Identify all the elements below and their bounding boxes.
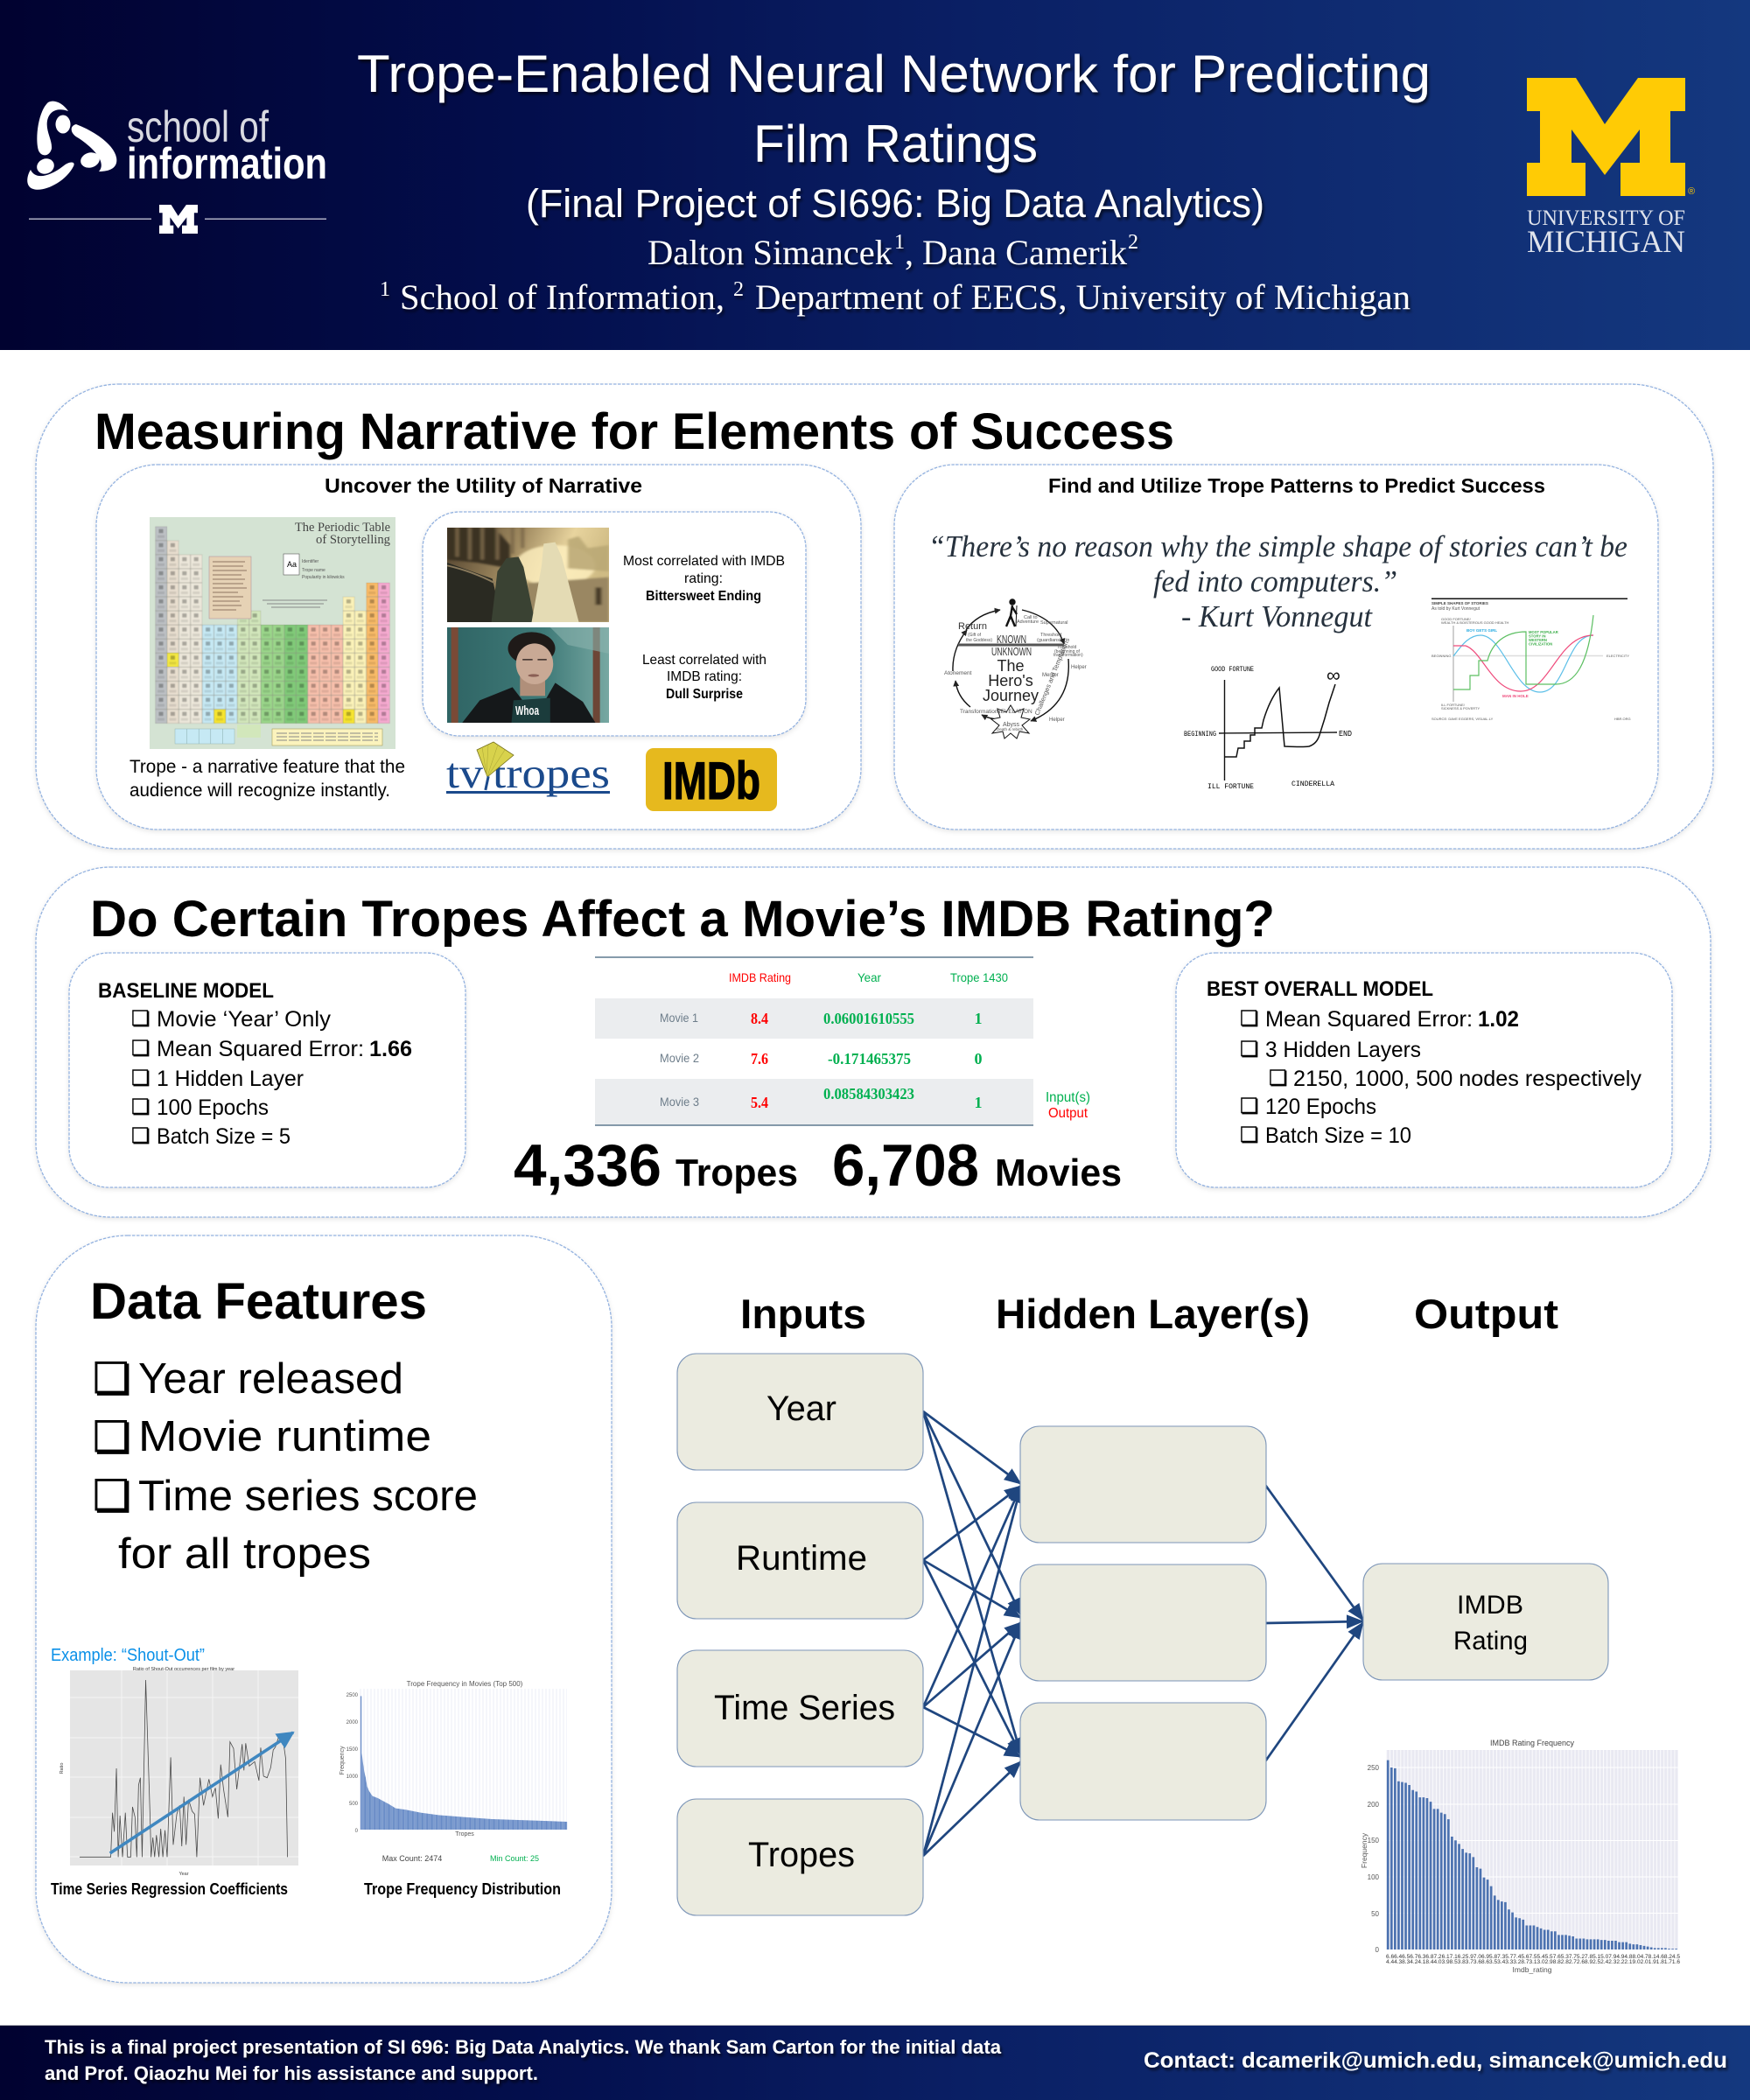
diagram: neural network [677,1291,1608,1915]
diagram: Cinderella story shape: CINDERELLA [1292,780,1334,788]
panel: best overall model [1176,953,1672,1187]
chart: trope frequency distribution: 1000 [346,1774,359,1780]
chart: simple shapes of stories: SICKNESS & POVERTY [1441,706,1480,710]
table row: movie 2: 7.6 [751,1050,768,1068]
list: data features: Time series score [138,1473,478,1520]
node: year: Year [766,1390,836,1428]
node: hidden layer 2 [1020,1564,1266,1681]
diagram: hero's journey: Challenges and Temptations [1033,637,1071,717]
heading: baseline model: BASELINE MODEL [98,979,274,1003]
chart: simple shapes of stories: WEALTH & BOISTEROUS GOOD HEALTH [1441,620,1509,625]
image: periodic table of storytelling: of Storytelling [316,533,390,547]
affiliations [380,277,1410,317]
arrows: hidden layers to output [1265,1485,1363,1761]
diagram: hero's journey: KNOWN [997,633,1026,646]
panel: do certain tropes affect rating [36,867,1711,1217]
table row: movie 1: Movie 1 [660,1011,698,1025]
diagram: Cinderella story shape: END [1339,730,1352,738]
table row: movie 3: 5.4 [751,1094,768,1111]
diagram: hero's journey: The [997,657,1025,675]
authors: Dana Camerik [922,233,1127,272]
chart: imdb rating frequency: 250 [1368,1764,1380,1772]
diagram: hero's journey: Supernatural [1040,620,1068,626]
diagram: hero's journey: Abyss [1003,722,1020,728]
diagram: hero's journey: Mentor [1042,673,1059,678]
list: baseline parameters: ❏ [131,1095,150,1119]
table row: movie 3: Movie 3 [660,1095,699,1109]
diagram: hero's journey: Return [958,621,987,632]
text: least correlated: IMDB rating: [667,669,742,684]
chart: simple shapes of stories: BEGINNING [1432,654,1451,658]
header banner [0,0,1750,350]
heading: find and utilize: Find and Utilize Trope Patterns to Predict Success [1048,474,1545,497]
image: periodic table of storytelling [150,517,396,749]
chart: imdb rating frequency: IMDB Rating Frequency [1490,1739,1575,1747]
quote: Kurt Vonnegut [928,529,1628,634]
quote: Kurt Vonnegut: fed into computers.” [1153,564,1397,598]
chart: simple shapes of stories: SIMPLE SHAPES OF STORIES [1432,601,1488,606]
node: tropes: Tropes [748,1836,855,1874]
chart: imdb rating frequency: 50 [1371,1910,1380,1918]
chart: trope frequency distribution: 500 [349,1802,359,1807]
text: most correlated: Bittersweet Ending [646,589,761,604]
diagram: hero's journey: the Goddess) [966,638,992,643]
logo: tv tropes [446,742,610,797]
text: trope definition [130,757,405,801]
diagram: hero's journey: (guardians) [1037,638,1061,643]
list: baseline parameters: Movie ‘Year’ Only [157,1007,332,1032]
list: baseline parameters: 1 Hidden Layer [157,1067,304,1091]
node: hidden layer 3 [1020,1703,1266,1820]
stat: 4,336 tropes: 4,336 [514,1132,662,1199]
diagram: hero's journey: Helper [1071,665,1087,670]
quote: Kurt Vonnegut: - Kurt Vonnegut [1181,599,1373,634]
caption: time series: Time Series Regression Coefficients [51,1880,288,1898]
diagram: hero's journey: Atonement [944,670,972,676]
diagram: hero's journey: Threshold [1057,645,1076,650]
logo divider with M [29,205,326,234]
icon: block M [1527,78,1685,196]
list: baseline parameters [131,1006,412,1149]
arrows: inputs to hidden layers [923,1411,1021,1856]
acknowledgement: and Prof. Qiaozhu Mei for his assistance and support. [45,2062,538,2084]
list: best model parameters: Mean Squared Error: [1265,1007,1473,1032]
acknowledgement [45,2036,1002,2084]
image: periodic table of storytelling: The Periodic Table [295,521,390,535]
list: best model parameters: ❏ [1240,1006,1259,1031]
diagram: hero's journey: (beginning of [1054,649,1081,654]
table legend: Output [1048,1106,1088,1121]
node: year [677,1354,923,1470]
image: bittersweet ending still [447,528,609,622]
affiliations: 1 [380,278,390,301]
text: least correlated: Least correlated with [642,653,766,668]
panel: measuring narrative [36,384,1713,849]
list: best model parameters: 3 Hidden Layers [1265,1038,1421,1062]
chart: simple shapes of stories: HBR.ORG [1614,717,1631,721]
list: best model parameters: Batch Size = 10 [1265,1124,1411,1148]
footer banner [0,2025,1750,2100]
panel: find and utilize trope patterns [894,465,1658,830]
list: baseline parameters: ❏ [131,1066,150,1090]
table legend [1046,1090,1090,1121]
chart: simple shapes of stories: STORY IN [1529,634,1545,639]
diagram: Cinderella story shape: BEGINNING [1184,731,1216,738]
text: most correlated: rating: [684,571,723,586]
authors: 2 [1128,231,1138,254]
diagram: hero's journey [944,600,1087,738]
list: baseline parameters: ❏ [131,1124,150,1148]
subtitle: (Final Project of SI696: Big Data Analytics) [526,181,1264,226]
image: periodic table of storytelling: Identifier [302,559,319,564]
diagram: Cinderella story shape [1184,664,1352,791]
chart: simple shapes of stories: BOY GETS GIRL [1466,628,1497,633]
diagram: hero's journey: Death & rebirth [997,727,1024,732]
chart: imdb rating frequency: 100 [1368,1873,1380,1881]
diagram: hero's journey: Helper [1049,718,1065,723]
diagram: hero's journey: REVELATION [997,709,1032,715]
title [357,45,1431,173]
list: best model parameters: 1.02 [1478,1007,1519,1032]
stat: 4,336 tropes [514,1132,798,1199]
chart: time series regression [60,1667,298,1877]
chart: imdb rating frequency: 200 [1368,1801,1380,1809]
caption: trope frequency: Trope Frequency Distribution [364,1880,561,1898]
list: baseline parameters: ❏ [131,1036,150,1060]
diagram: hero's journey: Call to [1024,615,1038,620]
chart: trope frequency distribution: Max Count: 2474 [382,1854,442,1863]
node: runtime [677,1502,923,1619]
heading: best overall model: BEST OVERALL MODEL [1207,977,1433,1001]
table row: movie 1 [660,1010,982,1027]
chart: imdb rating frequency [1360,1739,1681,1974]
list: data features [93,1354,478,1578]
logo: tv tropes: tv [446,749,484,797]
list: baseline parameters: Batch Size = 5 [157,1124,290,1149]
diagram: hero's journey: Threshold [1040,633,1061,638]
image: periodic table of storytelling: Popularity in kilowicks [302,575,345,580]
authors: Dalton Simancek [648,233,892,272]
list: data features: Movie runtime [138,1413,431,1460]
node: time series [677,1650,923,1767]
authors: 1 [894,231,905,254]
table: sample data [595,957,1090,1125]
text: most correlated: Most correlated with IMDB [623,554,785,569]
chart: simple shapes of stories: ILL FORTUNE/ [1441,703,1466,707]
table row: movie 2 [660,1050,982,1068]
text: least correlated [642,653,766,702]
diagram: Cinderella story shape: ∞ [1326,664,1340,686]
list: best model parameters: ❏ [1240,1037,1259,1061]
affiliations: Department of EECS, University of Michigan [755,277,1410,317]
chart: trope frequency distribution: Min Count: 25 [490,1854,539,1863]
chart: trope frequency distribution: Tropes [455,1831,474,1838]
table row: movie 3: 1 [975,1094,982,1111]
heading: output: Output [1414,1291,1558,1337]
panel: data features [36,1236,612,1983]
chart: simple shapes of stories: MAN IN HOLE [1502,694,1529,698]
list: best model parameters [1240,1006,1642,1148]
node: hidden layer 1 [1020,1426,1266,1543]
text: most correlated [623,554,785,604]
node: runtime: Runtime [736,1539,867,1578]
diagram: hero's journey: (Gift of [968,633,982,638]
node: imdb rating: IMDB [1457,1591,1523,1620]
table header: IMDB Rating [729,970,791,984]
chart: trope frequency distribution: Trope Frequency in Movies (Top 500) [407,1680,523,1688]
panel: uncover the utility of narrative [96,465,861,830]
authors: , [905,233,914,272]
diagram: hero's journey: Hero's [988,672,1033,690]
diagram: Cinderella story shape: GOOD FORTUNE [1211,666,1254,674]
node: imdb rating: Rating [1453,1627,1528,1656]
heading: uncover: Uncover the Utility of Narrative [325,474,642,497]
chart: simple shapes of stories [1432,598,1631,721]
diagram: Cinderella story shape: ILL FORTUNE [1208,783,1254,791]
table row: movie 2: 0 [975,1050,982,1068]
node: tropes [677,1799,923,1915]
list: data features: ❏ [93,1354,131,1404]
heading: data features: Data Features [90,1273,427,1330]
heading: measuring narrative: Measuring Narrative for Elements of Success [94,403,1174,460]
chart: simple shapes of stories: SOURCE: DAVE EGGERS, VISUAL.LY [1432,717,1494,721]
image: dull surprise still [447,627,609,723]
image: periodic table of storytelling: Trope name [302,568,326,573]
table row: movie 1: 0.06001610555 [823,1010,914,1027]
wordmark line 2: MICHIGAN [1527,224,1685,259]
list: data features: for all tropes [118,1530,371,1578]
table header [729,970,1008,984]
panel: baseline model [69,953,466,1187]
chart: trope frequency distribution: 2500 [346,1693,359,1698]
image: periodic table of storytelling: Aa [287,560,297,569]
chart: imdb rating frequency: Frequency [1360,1832,1368,1868]
list: baseline parameters: 100 Epochs [157,1096,269,1120]
heading: do certain tropes: Do Certain Tropes Affect a Movie’s IMDB Rating? [90,891,1275,948]
list: baseline parameters: 1.66 [369,1037,412,1061]
table row: movie 3 [660,1085,982,1111]
list: best model parameters: ❏ [1240,1094,1259,1118]
chart: trope frequency distribution [340,1680,567,1863]
icon: school of information swirl [27,102,116,190]
list: best model parameters: 2150, 1000, 500 nodes respectively [1293,1067,1642,1091]
chart: trope frequency distribution: 0 [355,1829,359,1834]
chart: simple shapes of stories: MOST POPULAR [1529,630,1558,634]
chart: trope frequency distribution: Frequency [340,1746,346,1775]
heading: inputs: Inputs [740,1291,866,1337]
list: baseline parameters: Mean Squared Error: [157,1037,364,1061]
table legend: Input(s) [1046,1090,1090,1105]
arrow: upward trend [110,1732,293,1853]
chart: time series regression: Ratio of Shout-Out occurrences per film by year [133,1667,234,1672]
table header: Trope 1430 [950,970,1008,984]
icon: hiker [1006,600,1017,626]
stat: 6,708 movies [832,1132,1122,1199]
table row: movie 1: 8.4 [751,1010,768,1027]
table row: movie 2: -0.171465375 [828,1050,911,1068]
node: time series: Time Series [714,1689,895,1727]
title: Film Ratings [753,115,1038,173]
journey arrows [953,610,1068,721]
list: data features: ❏ [93,1412,131,1462]
logo text: school of: school of [127,102,269,151]
stat: 4,336 tropes: Tropes [676,1152,798,1194]
text: trope definition: Trope - a narrative feature that the [130,757,405,777]
panel: correlated tropes [423,512,806,736]
acknowledgement: This is a final project presentation of SI 696: Big Data Analytics. We thank Sam Carton for the initial data [45,2036,1002,2058]
chart: imdb rating frequency: 150 [1368,1837,1380,1844]
table header: Year [858,970,881,984]
affiliations: School of Information, [400,277,724,317]
list: data features: Year released [138,1355,403,1403]
list: best model parameters: ❏ [1269,1066,1288,1090]
diagram: hero's journey: transformation) [1054,653,1083,658]
table row: movie 2: Movie 2 [660,1051,699,1065]
logo: University of Michigan [1527,78,1695,259]
caption on still: Whoa [515,704,539,718]
text: least correlated: Dull Surprise [666,687,743,702]
chart: imdb rating frequency: Imdb_rating [1513,1965,1552,1974]
diagram: hero's journey: Transformation [960,709,998,715]
label: example shout-out: Example: “Shout-Out” [51,1646,205,1665]
logo: school of information [27,102,327,234]
node: imdb rating [1363,1564,1608,1680]
chart: time series regression: Year [178,1872,189,1877]
chart: simple shapes of stories: As told by Kurt Vonnegut [1432,606,1480,612]
diagram: hero's journey: UNKNOWN [991,645,1032,658]
affiliations: 2 [733,278,744,301]
logo: tv tropes: tropes [493,749,610,797]
chart: imdb rating frequency: 6.66.46.56.76.36.87.26.17.16.25.97.06.95.87.35.77.45.67.55.45.57.65.37.75.27.85.15.07.94.94.88.04.78.14.68.24.5 [1386,1955,1681,1960]
chart: simple shapes of stories: GOOD FORTUNE/ [1441,617,1472,621]
wordmark line 1: UNIVERSITY OF [1527,206,1685,230]
chart: simple shapes of stories: WESTERN [1529,638,1547,642]
list: data features: ❏ [93,1471,131,1521]
authors [648,231,1138,272]
contact: Contact: dcamerik@umich.edu, simancek@umich.edu [1144,2048,1727,2073]
chart: trope frequency distribution: 1500 [346,1747,359,1753]
table row: movie 1: 1 [975,1010,982,1027]
stat: 6,708 movies: Movies [995,1152,1122,1194]
diagram: hero's journey: Journey [983,687,1039,704]
chart: imdb rating frequency: 4.44.38.34.24.18.44.03.98.53.83.73.68.63.53.43.33.28.73.13.02.98.82.82.72.68.92.52.42.32.22.19.02.01.91.81.71.6 [1386,1960,1681,1965]
title: Trope-Enabled Neural Network for Predicting [357,45,1431,103]
list: best model parameters: 120 Epochs [1265,1095,1376,1119]
logo text: information: information [127,139,327,188]
chart: simple shapes of stories: CIVILIZATION [1529,642,1552,646]
chart: time series regression: Ratio [60,1763,65,1774]
chart: simple shapes of stories: ELECTRICITY [1606,654,1629,658]
registered mark: ® [1688,186,1695,197]
diagram: hero's journey: Adventure [1017,620,1039,625]
chart: trope frequency distribution: 2000 [346,1720,359,1726]
chart: imdb rating frequency: 0 [1376,1946,1380,1954]
table row: movie 3: 0.08584303423 [823,1085,914,1102]
list: baseline parameters: ❏ [131,1006,150,1031]
quote: Kurt Vonnegut: “There’s no reason why the simple shape of stories can’t be [928,529,1628,564]
stat: 6,708 movies: 6,708 [832,1132,979,1199]
heading: hidden layers: Hidden Layer(s) [996,1291,1310,1337]
logo: IMDb: IMDb [662,752,760,810]
text: trope definition: audience will recognize instantly. [130,780,390,801]
list: best model parameters: ❏ [1240,1123,1259,1147]
